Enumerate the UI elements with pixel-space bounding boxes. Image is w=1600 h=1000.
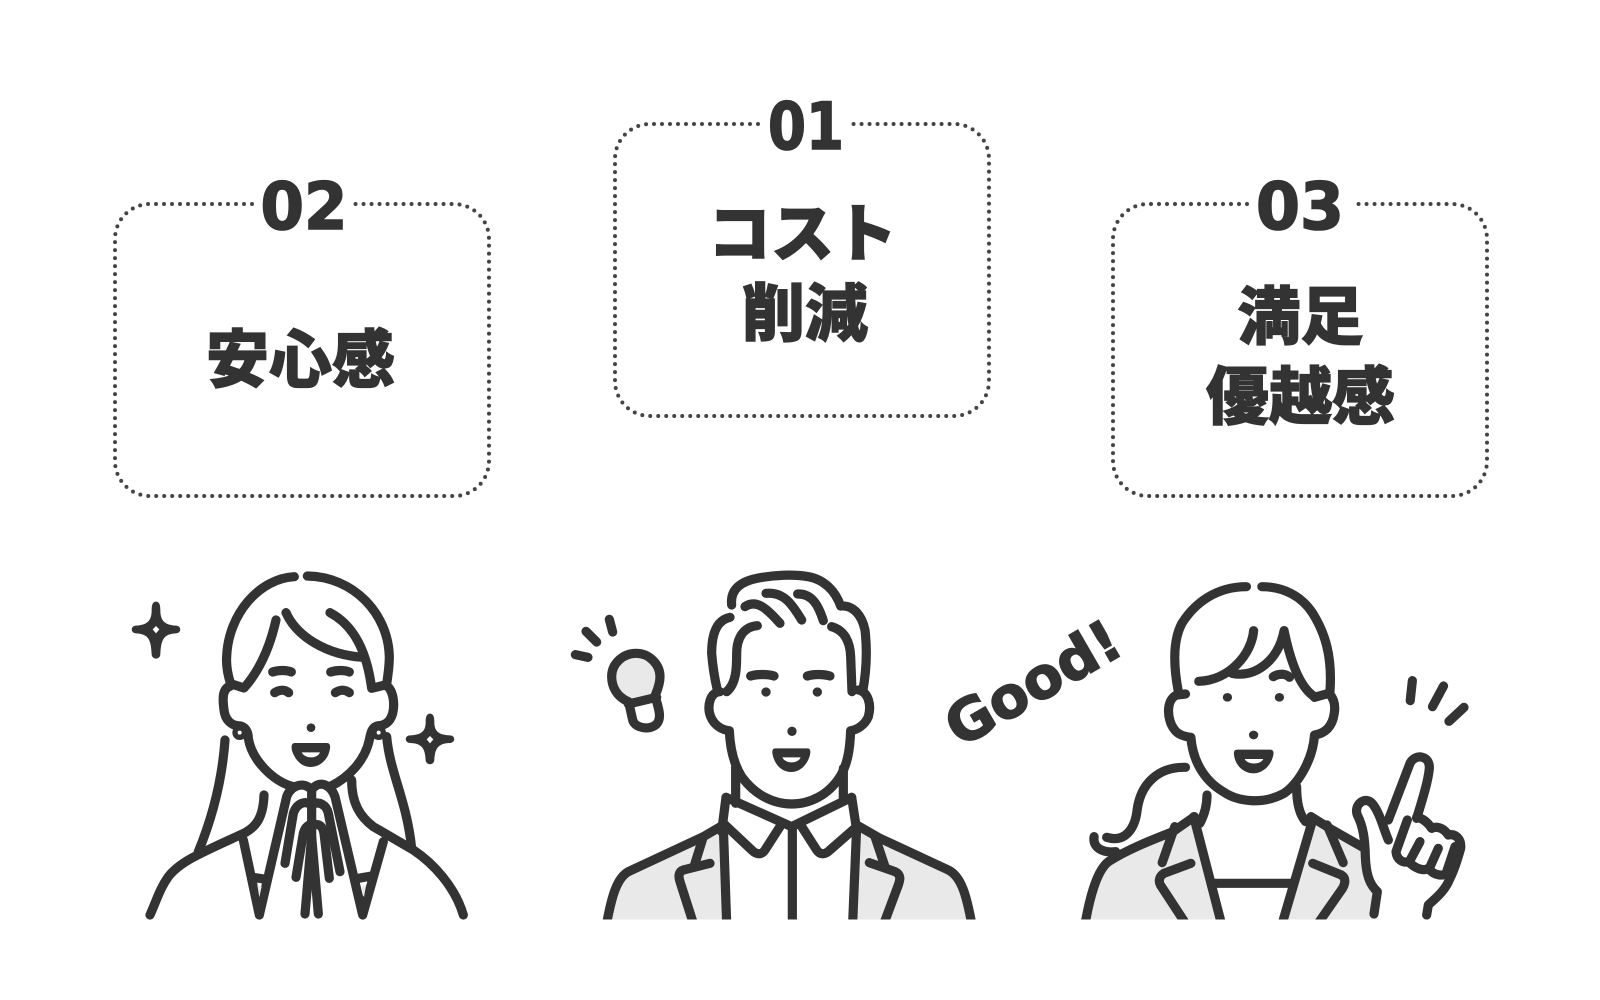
face <box>709 674 870 804</box>
jacket fill <box>1090 824 1216 920</box>
label 安心感: 安心感 <box>206 326 395 396</box>
collar and suit <box>607 767 972 923</box>
illustration: relieved woman with praying hands <box>132 576 463 915</box>
praying hands <box>285 790 340 914</box>
number 02: 02 <box>260 170 348 245</box>
icon: emphasis rays <box>1410 681 1464 721</box>
icon: light bulb <box>575 619 660 728</box>
face <box>1169 674 1335 801</box>
icon: sparkle right <box>406 714 454 764</box>
label コスト削減: コスト <box>708 200 897 270</box>
jacket fill <box>612 834 722 920</box>
label 満足優越感: 優越感 <box>1206 363 1395 433</box>
jacket and blouse <box>1085 787 1365 923</box>
illustration: woman pointing finger <box>1085 587 1464 923</box>
icon: pointing hand <box>1357 757 1461 917</box>
number 01: 01 <box>768 90 844 165</box>
hair <box>1094 587 1330 852</box>
icon: sparkle left <box>132 602 180 659</box>
illustration: man in suit with idea <box>575 575 972 923</box>
body and collar <box>150 780 463 915</box>
label 満足優越感: 満足 <box>1238 283 1364 353</box>
panel: 03 満足優越感 <box>1113 170 1487 496</box>
hair <box>712 575 866 692</box>
label コスト削減: 削減 <box>742 280 868 350</box>
hair <box>198 576 412 852</box>
text: Good!: Good! <box>934 607 1133 760</box>
panel: 01 コスト削減 <box>615 90 989 416</box>
face <box>223 670 394 787</box>
number 03: 03 <box>1256 170 1344 245</box>
panel: 02 安心感 <box>115 170 489 496</box>
